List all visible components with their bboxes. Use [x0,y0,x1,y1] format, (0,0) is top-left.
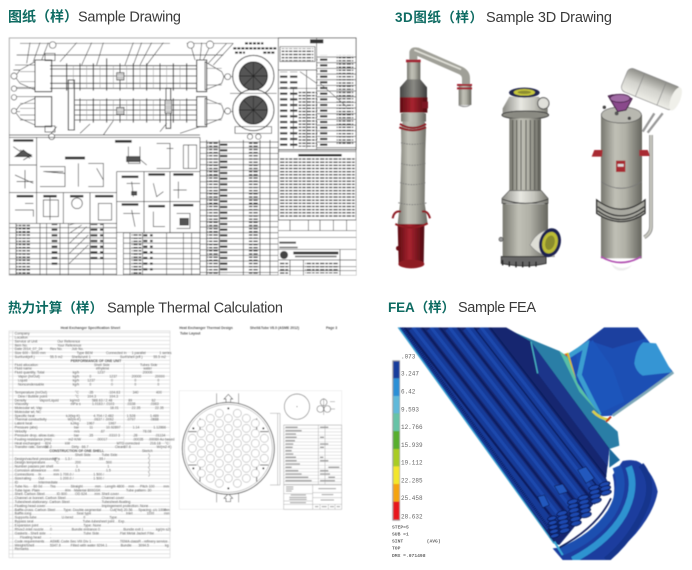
legend values: 9.593 [401,406,419,413]
heat exchanger specification sheet: water [143,367,153,371]
heat exchanger specification sheet: - [50,531,51,535]
heat exchanger specification sheet: 1237 [97,371,105,375]
heat exchanger specification sheet: 52.2 [45,445,52,449]
heat exchanger specification sheet: Your Reference [57,343,81,347]
heat exchanger specification sheet: Baffle-long [15,512,31,516]
heat exchanger specification sheet: 200 [75,461,81,465]
heat exchanger specification sheet: Thermal conductivity [15,418,47,422]
balloons [11,41,261,140]
heat exchanger specification sheet: Out [38,476,44,480]
heat exchanger specification sheet: Corrosion allowance [15,469,46,473]
heat exchanger specification sheet: 62 [152,398,156,402]
heat exchanger specification sheet: 66.7 [82,445,89,449]
heat exchanger specification sheet: mm [164,508,170,512]
heat exchanger specification sheet: .00069 Ao based [148,437,175,441]
heat exchanger specification sheet: 20000 [155,375,165,379]
heat exchanger specification sheet: Exp. [118,520,125,524]
heat exchanger specification sheet: 0 [111,382,113,386]
right column parts list [200,38,278,275]
heat exchanger specification sheet: Sketch [142,449,153,453]
heat exchanger specification sheet: Tube type: Plain [15,488,40,492]
right specification tables [278,38,356,150]
heat exchanger specification sheet: Tubesheet-stationary: Carbon Steel [15,500,70,504]
heat exchanger specification sheet: .0888 [150,418,159,422]
heat exchanger specification sheet: Density [15,398,27,402]
heat exchanger specification sheet: Design temperature [15,461,45,465]
heat exchanger specification sheet: 104.3 [87,394,96,398]
heat exchanger specification sheet: Impingement protection: None [102,504,148,508]
title: Sample FEA [388,299,536,316]
solution info text: STEP=5 [392,525,409,531]
heat exchanger specification sheet: #/m [65,488,71,492]
heat exchanger specification sheet: Baffle-cross: Carbon Steel [15,508,55,512]
heat exchanger specification sheet: kJ/(kg·K) [66,414,80,418]
heat exchanger specification sheet: 1100 [147,512,154,516]
heat exchanger specification sheet: 20000 [132,375,141,379]
heat exchanger specification sheet: Channel cover [102,496,125,500]
heat exchanger specification sheet: 55.5 m2 [153,355,166,359]
heat exchanger specification sheet: .00017 [97,437,107,441]
tube layout sheet header: Shell&Tube V8.0 (ASME 2012) [250,326,299,330]
heat exchanger specification sheet: .0310 3 [108,433,120,437]
heat exchanger specification sheet: Service of Unit [15,339,37,343]
heat exchanger specification sheet: 1 [107,465,109,469]
heat exchanger specification sheet: W/(m·K) [68,418,81,422]
heat exchanger specification sheet: Pressure drop, allow./calc. [15,433,55,437]
heat exchanger specification sheet: Specific heat [15,414,35,418]
title: Sample 3D Drawing: 3D图纸（样） [395,9,483,25]
heat exchanger specification sheet: Supports-tube [15,516,37,520]
heat exchanger specification sheet: 500 [106,461,112,465]
heat exchanger specification sheet: kg/h [73,382,79,386]
heat exchanger specification sheet: ethylene [96,367,109,371]
heat exchanger specification sheet: 1237 [109,375,117,379]
legend values: 28.632 [401,513,423,520]
heat exchanger specification sheet: Shell Side [94,363,110,367]
heat exchanger specification sheet: 104.3 [109,394,118,398]
heat exchanger specification sheet: 0 [83,516,85,520]
heat exchanger specification sheet: 1 500 / [93,472,104,476]
panel: FEA stress result [392,327,673,560]
heat exchanger specification sheet: -35 [88,390,93,394]
legend values: 15.939 [401,442,423,449]
tube layout sheet header: Tube Layout [180,332,201,336]
heat exchanger specification sheet: mPa·s [71,402,81,406]
heat exchanger specification sheet: kg [165,543,169,547]
heat exchanger specification sheet: mm [164,512,170,516]
heat exchanger specification sheet: 10.92897 [106,426,121,430]
heat exchanger specification sheet: Tube No. [15,484,29,488]
heat exchanger specification sheet: 216.18 [150,441,161,445]
heat exchanger specification sheet: 0 [134,379,136,383]
heat exchanger specification sheet: kg/(m·s2) [156,528,171,532]
heat exchanger specification sheet: Heat exchanged [15,441,40,445]
heat exchanger specification sheet: ASME Code Sec VIII Div 1 [50,539,91,543]
solution info text: SUB =1 [392,532,409,538]
heat exchanger specification sheet: mm [94,492,100,496]
heat exchanger specification sheet: 1 [76,465,78,469]
heat exchanger specification sheet: .28 [133,433,138,437]
heat exchanger specification sheet: Straight [71,484,83,488]
heat exchanger specification sheet: 87.6 [124,445,131,449]
heat exchanger specification sheet: 22.35 [132,406,140,410]
heat exchanger specification sheet: Design/vac/test pressure g [15,457,56,461]
heat exchanger specification sheet: Tube Side [102,453,117,457]
heat exchanger specification sheet: PERFORMANCE OF ONE UNIT [71,359,122,363]
heat exchanger specification sheet: 11 [89,426,93,430]
heat exchanger specification sheet: Bundle exit 1 [123,528,144,532]
heat exchanger specification sheet: Tube Side [83,531,99,535]
heat exchanger specification sheet: Floating head cover [15,504,46,508]
heat exchanger specification sheet: 0 [89,375,91,379]
heat exchanger specification sheet: Latent heat [15,422,32,426]
detail grid [9,137,200,275]
heat exchanger specification sheet: Molecular wt, Vap [15,406,42,410]
heat exchanger specification sheet: Shell Side [75,453,91,457]
heat exchanger specification sheet: Filled with water 9294.1 [71,543,107,547]
heat exchanger specification sheet: Bundle [121,543,132,547]
heat exchanger specification sheet: Bypass seal [15,520,34,524]
heat exchanger specification sheet: Location [15,335,28,339]
heat exchanger specification sheet: ID [15,480,19,484]
heat exchanger specification sheet: bar [74,426,80,430]
heat exchanger specification sheet: Type: Double-segmental [63,508,101,512]
legend values: 22.285 [401,477,423,484]
exchanger elevation view [9,43,233,135]
tube bundle [397,327,606,543]
heat exchanger specification sheet: - [50,524,51,528]
heat exchanger specification sheet: Tubesheet-floating [102,500,130,504]
legend values: 3.247 [401,371,419,378]
title: Sample Drawing: Sample Drawing [78,10,181,26]
heat exchanger specification sheet: Tubes Side [140,363,158,367]
heat exchanger specification sheet: kg/h [73,375,79,379]
heat exchanger specification sheet: Surf/shell (eff.) [120,355,143,359]
panel: thermal calculation sheets [9,326,342,558]
heat exchanger specification sheet: 1.0163 / .0103 [92,402,114,406]
heat exchanger specification sheet: .55 / [98,457,105,461]
tube layout title block [284,485,342,509]
heat exchanger specification sheet: 1.528 [127,414,135,418]
heat exchanger specification sheet: 1 500 / [93,476,104,480]
heat exchanger specification sheet: 824 [45,441,51,445]
heat exchanger specification sheet: MPa [53,457,60,461]
heat exchanger specification sheet: °C [165,441,169,445]
tubesheet end views [230,43,277,133]
heat exchanger specification sheet: Rev No. [50,347,63,351]
legend values: 19.112 [401,459,423,466]
heat exchanger specification sheet: .67 [100,430,105,434]
heat exchanger specification sheet: Job No. [72,347,84,351]
heat exchanger specification sheet: .01134 [155,433,165,437]
heat exchanger specification sheet: 22.35 [155,406,164,410]
solution info text: (AVG) [427,539,441,545]
heat exchanger specification sheet: .0363 [150,402,159,406]
heat exchanger specification sheet: kg/h [73,371,79,375]
heat exchanger specification sheet: 1 series [159,351,172,355]
heat exchanger specification sheet: Dew / Bubble point [18,394,47,398]
heat exchanger specification sheet: 3094.5 [138,543,149,547]
solution info text: SINT [392,539,403,545]
heat exchanger specification sheet: m2·K/W [68,437,82,441]
heat exchanger specification sheet: 1237 [87,379,95,383]
heat exchanger specification sheet: 1 700.0 / [60,472,74,476]
heat exchanger specification sheet: Type: None [83,524,101,528]
heat exchanger specification sheet: Spacing: c/c 1000 [138,508,166,512]
heat exchanger specification sheet: 1.12866 [153,426,166,430]
heat exchanger specification sheet: Tube pattern: 30 [126,488,152,492]
bottom flange [553,448,658,560]
legend values: 12.766 [401,424,423,431]
heat exchanger specification sheet: 0 [157,379,159,383]
heat exchanger specification sheet: Heat Exchanger Specification Sheet [61,326,121,330]
title: Sample Thermal Calculation: 热力计算（样） [8,300,103,316]
heat exchanger specification sheet: Remarks [15,547,29,551]
heat exchanger specification sheet: Transfer rate, Service [15,445,48,449]
title: Sample FEA: FEA（样） [388,299,455,315]
title: Sample Drawing: 图纸（样） [8,8,78,24]
heat exchanger specification sheet: kW [65,441,71,445]
heat exchanger specification sheet: m/s [74,430,80,434]
heat exchanger specification sheet: 1 200.0 / [60,476,74,480]
heat exchanger specification sheet: 1.5 [106,469,111,473]
heat exchanger specification sheet: Type [109,516,117,520]
heat exchanger specification sheet: In [38,472,41,476]
legend values: 6.42 [401,389,416,396]
title: Sample 3D Drawing [395,9,612,26]
heat exchanger specification sheet: Vapor/Liquid [39,398,59,402]
3D model: vessel with top drum [592,67,685,271]
tube layout sheet header: Heat Exchanger Thermal Design [179,326,233,330]
heat exchanger specification sheet: kg/h [73,379,79,383]
heat exchanger specification sheet [9,326,175,558]
solution info text [392,525,441,559]
heat exchanger specification sheet: 4.704 / 2.482 [93,414,114,418]
heat exchanger specification sheet: mm [53,472,59,476]
title: Sample FEA: Sample FEA [458,300,536,316]
legend values: 25.458 [401,495,423,502]
heat exchanger specification sheet: bar [74,433,80,437]
heat exchanger specification sheet: OD 624 [75,492,87,496]
heat exchanger specification sheet: 1.5 [75,469,80,473]
3D model: tube bundle vessel [499,88,564,267]
heat exchanger specification sheet: 0 [50,528,52,532]
heat exchanger specification sheet: .0637 / .0092 [93,418,114,422]
heat exchanger specification sheet: 1.14 [133,426,140,430]
legend values [401,353,423,520]
heat exchanger specification sheet: CONSTRUCTION OF ONE SHELL [49,449,105,453]
heat exchanger specification sheet: U-bend [62,516,73,520]
heat exchanger specification sheet: Company [15,331,30,335]
heat exchanger specification sheet: ID 600 [57,492,67,496]
heat exchanger specification sheet: Dirty [72,445,79,449]
heat exchanger specification sheet: Length 4800 [105,484,124,488]
heat exchanger specification sheet: Tube-tubesheet joint [83,520,114,524]
heat exchanger specification sheet: 588.63 / 2.48 [92,398,112,402]
heat exchanger specification sheet: mm [53,469,59,473]
heat exchanger specification sheet: Weight/Shell [15,543,34,547]
heat exchanger specification sheet: Intermediate [38,480,58,484]
title block [278,220,356,275]
heat exchanger specification sheet: Shell: Carbon Steel [15,492,45,496]
title: Sample 3D Drawing: Sample 3D Drawing [486,10,612,26]
tube ends [547,481,612,539]
heat exchanger specification sheet: mm [163,484,169,488]
heat exchanger specification sheet: Pitch 100 [140,484,155,488]
heat exchanger specification sheet: Clean [115,445,124,449]
heat exchanger specification sheet: Shell cover [102,492,120,496]
heat exchanger specification sheet: Inlet [126,512,133,516]
FEA model [397,327,673,560]
heat exchanger specification sheet: Connected in [106,351,127,355]
heat exchanger specification sheet: Rhov2-Inlet nozzle [15,528,44,532]
heat exchanger specification sheet: W/(m2·K) [157,445,172,449]
heat exchanger specification sheet: Gaskets - Shell side [15,531,46,535]
tube layout sheet header [179,326,337,336]
heat exchanger specification sheet: Fouling resistance (min) [15,437,52,441]
heat exchanger specification sheet: Vapor (In/Out) [18,375,40,379]
heat exchanger specification sheet: Floating head [20,535,41,539]
heat exchanger specification sheet: Liquid [18,379,27,383]
heat exchanger specification sheet: .0338 [127,402,135,406]
title: Sample Thermal Calculation [8,300,283,316]
bottom left parts table [9,223,117,275]
heat exchanger specification sheet: Velocity [15,430,27,434]
heat exchanger specification sheet: 0 [157,382,159,386]
heat exchanger specification sheet: Type BEM [77,351,93,355]
heat exchanger specification sheet: °C [75,390,79,394]
heat exchanger specification sheet: .35 [88,433,93,437]
heat exchanger specification sheet: Size 600 - 6000 mm [15,351,46,355]
heat exchanger specification sheet: kJ/kg [71,422,79,426]
heat exchanger specification sheet: MTD corrected [117,441,140,445]
heat exchanger specification sheet: Seal type [77,512,91,516]
heat exchanger specification sheet: Item No. [15,343,28,347]
heat exchanger specification sheet: kg/m3 [70,398,80,402]
heat exchanger specification sheet: mm [95,484,101,488]
heat exchanger specification sheet: R - refinery service [138,539,168,543]
heat exchanger specification sheet: Shells/unit 1 [72,355,91,359]
heat exchanger specification sheet: °C [55,461,59,465]
title: Sample Thermal Calculation: Sample Thermal Calculation [107,300,283,316]
heat exchanger specification sheet: 0 [89,382,91,386]
heat exchanger specification sheet: 1.489 [150,414,159,418]
heat exchanger specification sheet: TEMA class [120,539,139,543]
heat exchanger specification sheet: 0 [111,379,113,383]
heat exchanger specification sheet: 0 [134,382,136,386]
heat exchanger specification sheet: Tks [50,484,56,488]
heat exchanger specification sheet: Cut(%d) 20.56 [110,508,133,512]
heat exchanger specification sheet: 1967 [108,422,116,426]
heat exchanger specification sheet: °C [75,394,79,398]
heat exchanger specification sheet: Code requirements [15,539,45,543]
heat exchanger specification sheet: Number passes per shell [15,465,53,469]
3D model: column with red flanges [393,50,472,268]
panel: 3D models [393,50,685,271]
heat exchanger specification sheet: Pressure (abs) [15,426,38,430]
heat exchanger specification sheet: 89 [128,398,132,402]
tube layout data table [284,425,342,484]
heat exchanger specification sheet: Temperature (In/Out) [15,390,47,394]
heat exchanger specification sheet: Channel or bonnet: Carbon Steel [15,496,66,500]
heat exchanger specification sheet: 1.3 / [65,457,72,461]
heat exchanger specification sheet: 78.08 [143,430,151,434]
heat exchanger specification sheet: 18.01 [110,406,119,410]
heat exchanger specification sheet: Our Reference [57,339,80,343]
heat exchanger specification sheet: 20000 [143,371,152,375]
tube layout drawing [179,391,342,509]
heat exchanger specification sheet: Fluid allocation [15,363,38,367]
heat exchanger specification sheet: 55.5 m2 [50,355,63,359]
bottom middle parts table [123,233,200,275]
heat exchanger specification sheet: Expansion joint [15,524,38,528]
solution info text: TOP [392,546,401,552]
heat exchanger specification sheet: 1 parallel [132,351,146,355]
heat exchanger specification sheet: Fluid name [15,367,32,371]
heat exchanger specification sheet: 340 [133,390,139,394]
heat exchanger specification sheet: Viscosity [15,402,29,406]
heat exchanger specification sheet: Molecular wt, NC [15,410,42,414]
stress color legend bar [392,360,400,521]
heat exchanger specification sheet: Connections [15,472,34,476]
heat exchanger specification sheet: 400 [156,390,162,394]
heat exchanger specification sheet: Date 2014_07_24 [15,347,42,351]
panel: engineering drawing sheet [9,38,356,275]
heat exchanger specification sheet: Surf/unit(eff.) [15,355,35,359]
heat exchanger specification sheet: Flat Metal Jacket Fibe [120,531,154,535]
title: Sample Drawing [8,8,181,26]
heat exchanger specification sheet: 1967 [87,422,94,426]
heat exchanger specification sheet: Fluid quantity, Total [15,371,45,375]
heat exchanger specification sheet: mm [128,484,134,488]
heat exchanger specification sheet: .00035 [133,437,143,441]
heat exchanger specification sheet: Material 800GSK [74,488,101,492]
heat exchanger specification sheet: Bundle entrance 0 [72,528,100,532]
heat exchanger specification sheet: Size/rating [15,476,31,480]
solution info text: DMX =.071498 [392,553,426,559]
heat exchanger specification sheet: -104.63 [108,390,120,394]
legend values: .073 [401,353,416,360]
heat exchanger specification sheet: .0797 [127,418,135,422]
heat exchanger specification sheet: Noncondensable [18,382,44,386]
heat exchanger specification sheet: - [50,535,51,539]
tube layout sheet header: Page 3 [326,326,337,330]
heat exchanger specification sheet: 5347.9 [50,543,61,547]
heat exchanger specification sheet: 60 0d [33,484,42,488]
general notes text [278,152,356,220]
